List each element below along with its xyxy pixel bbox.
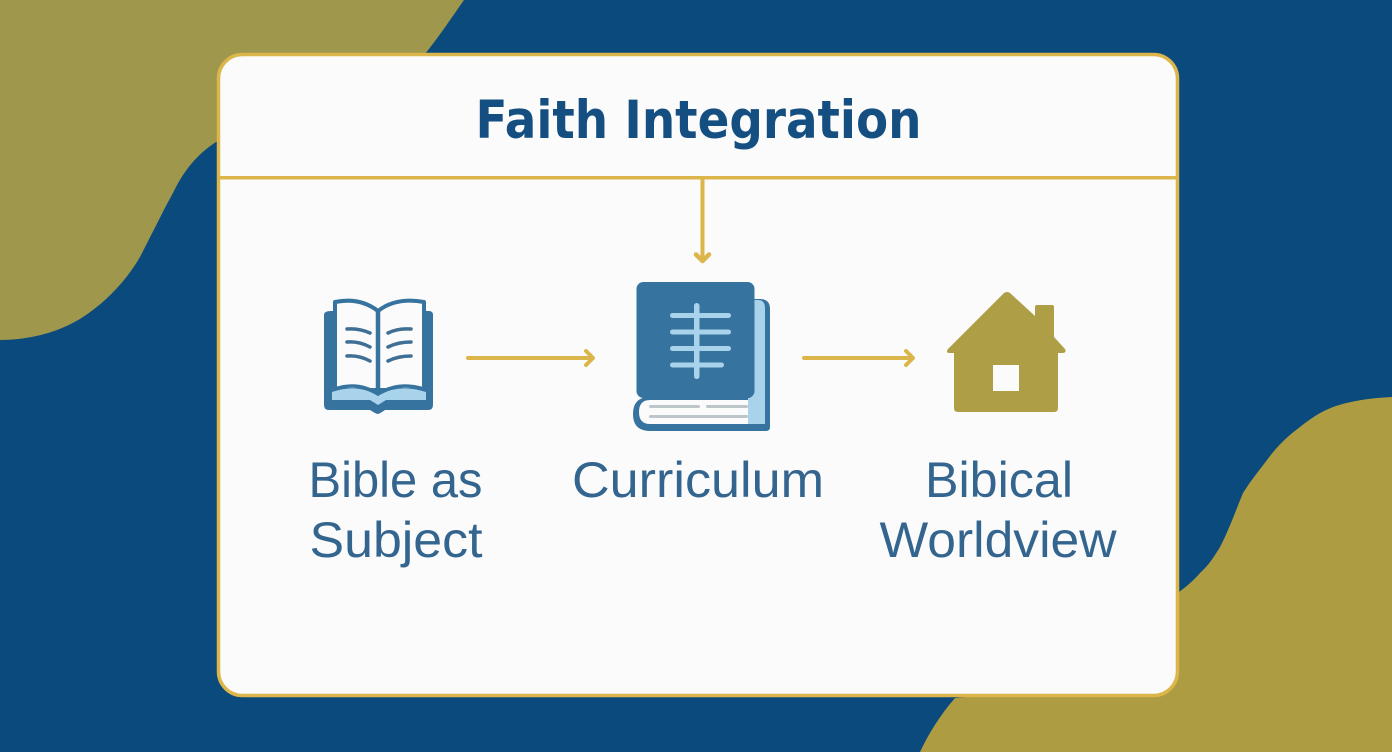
label: biblical worldview: Worldview xyxy=(880,512,1117,568)
icon: open bible xyxy=(324,301,433,414)
icon: curriculum book xyxy=(633,282,770,431)
divider: header rule xyxy=(220,176,1176,180)
title: Faith Integration xyxy=(476,90,922,151)
decorative blob: bottom right xyxy=(920,397,1392,752)
panel: main card xyxy=(218,54,1178,696)
arrow: title to curriculum xyxy=(696,180,709,261)
arrow: bible to curriculum xyxy=(468,351,593,365)
label: curriculum: Curriculum xyxy=(572,452,824,508)
label: biblical worldview: Bibical xyxy=(925,452,1073,508)
label: bible as subject: Subject xyxy=(310,512,483,568)
arrow: curriculum to worldview xyxy=(804,351,913,365)
icon: house xyxy=(947,292,1066,412)
label: bible as subject: Bible as xyxy=(308,452,482,508)
decorative blob: top left xyxy=(0,0,464,340)
